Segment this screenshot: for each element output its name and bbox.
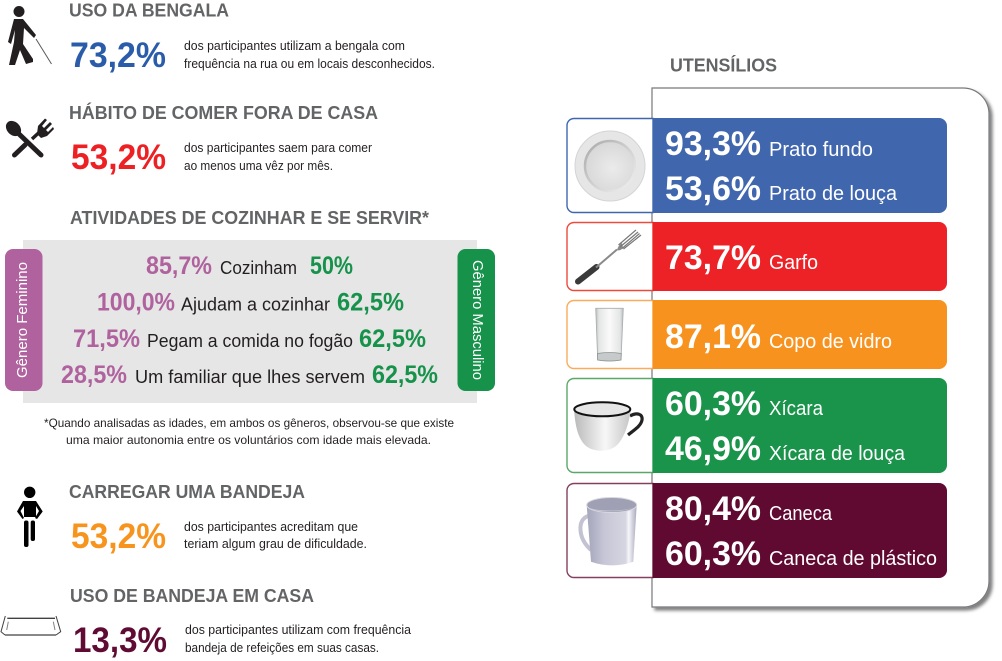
card: garfo xyxy=(567,222,947,291)
card: prato: 53,6% xyxy=(665,170,761,208)
row: cozinham: 85,7% xyxy=(146,252,212,280)
card: prato: Prato fundo xyxy=(769,139,873,161)
card: caneca: 60,3% xyxy=(665,535,761,573)
row: ajudam a cozinhar xyxy=(97,288,404,316)
icon: plate xyxy=(575,131,645,201)
text block: bandeja em casa description xyxy=(185,623,411,655)
row: um familiar que lhes servem: 62,5% xyxy=(372,361,438,389)
icon: glass xyxy=(596,308,623,361)
text block: bandeja description xyxy=(184,520,367,551)
icon: person with cane xyxy=(8,6,52,65)
row: pegam a comida no fogão: 62,5% xyxy=(359,325,426,353)
text block: comer fora description: dos participantes saem para comer xyxy=(184,141,372,155)
row: cozinham: 50% xyxy=(310,252,353,280)
text block: comer fora description xyxy=(184,141,372,173)
stat: 53,2% orange: 53,2% xyxy=(71,517,166,556)
row: cozinham: Cozinham xyxy=(220,258,297,278)
icon: person carrying a tray xyxy=(17,487,43,547)
row: pegam a comida no fogão: Pegam a comida no fogão xyxy=(147,331,353,351)
text block: bengala description: frequência na rua ou em locais desconhecidos. xyxy=(184,57,435,71)
stat: 53,2% red: 53,2% xyxy=(71,138,166,177)
panel: utensílios background xyxy=(652,88,989,607)
card: xícara: 46,9% xyxy=(665,430,761,468)
label: gênero feminino: Gênero Feminino xyxy=(14,262,31,378)
card: xícara xyxy=(567,378,947,473)
label: gênero feminino xyxy=(5,249,42,391)
row: um familiar que lhes servem: Um familiar que lhes servem xyxy=(135,367,365,387)
card: prato: 93,3% xyxy=(665,125,761,163)
footnote: uma maior autonomia entre os voluntários com idade mais elevada. xyxy=(66,433,431,447)
label: gênero masculino xyxy=(458,249,495,391)
row: ajudam a cozinhar: Ajudam a cozinhar xyxy=(181,294,330,314)
card: caneca: Caneca xyxy=(769,503,833,525)
icon: fork xyxy=(578,230,641,282)
row: ajudam a cozinhar: 100,0% xyxy=(97,288,175,316)
text block: bandeja em casa description: bandeja de refeições em suas casas. xyxy=(185,641,379,655)
heading: carregar uma bandeja: CARREGAR UMA BANDEJA xyxy=(69,481,305,502)
card: copo de vidro xyxy=(567,300,947,369)
card: garfo: Garfo xyxy=(769,252,818,274)
stat: 73,2%: 73,2% xyxy=(70,36,166,75)
label: gênero masculino: Gênero Masculino xyxy=(469,260,486,380)
card: copo de vidro: 87,1% xyxy=(665,318,761,356)
row: pegam a comida no fogão xyxy=(73,325,426,353)
row: um familiar que lhes servem: 28,5% xyxy=(61,361,127,389)
text block: bandeja description: teriam algum grau de dificuldade. xyxy=(184,537,367,551)
row: um familiar que lhes servem xyxy=(61,361,438,389)
card: garfo: 73,7% xyxy=(665,239,761,277)
card: caneca: Caneca de plástico xyxy=(769,548,937,570)
footnote xyxy=(44,416,454,447)
row: ajudam a cozinhar: 62,5% xyxy=(337,288,404,316)
text block: bengala description xyxy=(184,39,435,71)
icon: mug xyxy=(580,498,637,565)
icon: tray xyxy=(1,616,61,635)
icon: cup xyxy=(574,402,642,451)
heading: uso de bandeja em casa: USO DE BANDEJA EM CASA xyxy=(70,585,314,606)
card: prato: Prato de louça xyxy=(769,183,898,205)
footnote: *Quando analisadas as idades, em ambos os gêneros, observou-se que existe xyxy=(44,416,454,430)
heading: atividades de cozinhar e se servir: ATIVIDADES DE COZINHAR E SE SERVIR* xyxy=(70,207,430,228)
row: pegam a comida no fogão: 71,5% xyxy=(73,325,140,353)
heading: uso da bengala: USO DA BENGALA xyxy=(69,0,229,21)
text block: bandeja description: dos participantes acreditam que xyxy=(184,520,358,534)
panel: atividades xyxy=(5,240,495,403)
card: prato xyxy=(567,118,947,213)
card: xícara: 60,3% xyxy=(665,385,761,423)
card: caneca: 80,4% xyxy=(665,490,761,528)
stat: 13,3%: 13,3% xyxy=(73,621,167,660)
card: xícara: Xícara de louça xyxy=(769,443,906,465)
text block: bandeja em casa description: dos participantes utilizam com frequência xyxy=(185,623,411,637)
card: xícara: Xícara xyxy=(769,398,824,420)
card: caneca xyxy=(567,483,947,578)
text block: bengala description: dos participantes utilizam a bengala com xyxy=(184,39,405,53)
heading: utensílios: UTENSÍLIOS xyxy=(670,54,777,76)
card: copo de vidro: Copo de vidro xyxy=(769,331,892,353)
row: cozinham xyxy=(146,252,353,280)
text block: comer fora description: ao menos uma vêz por mês. xyxy=(184,159,333,173)
icon: spoon and fork xyxy=(3,118,54,155)
heading: hábito de comer fora de casa: HÁBITO DE COMER FORA DE CASA xyxy=(69,102,378,123)
